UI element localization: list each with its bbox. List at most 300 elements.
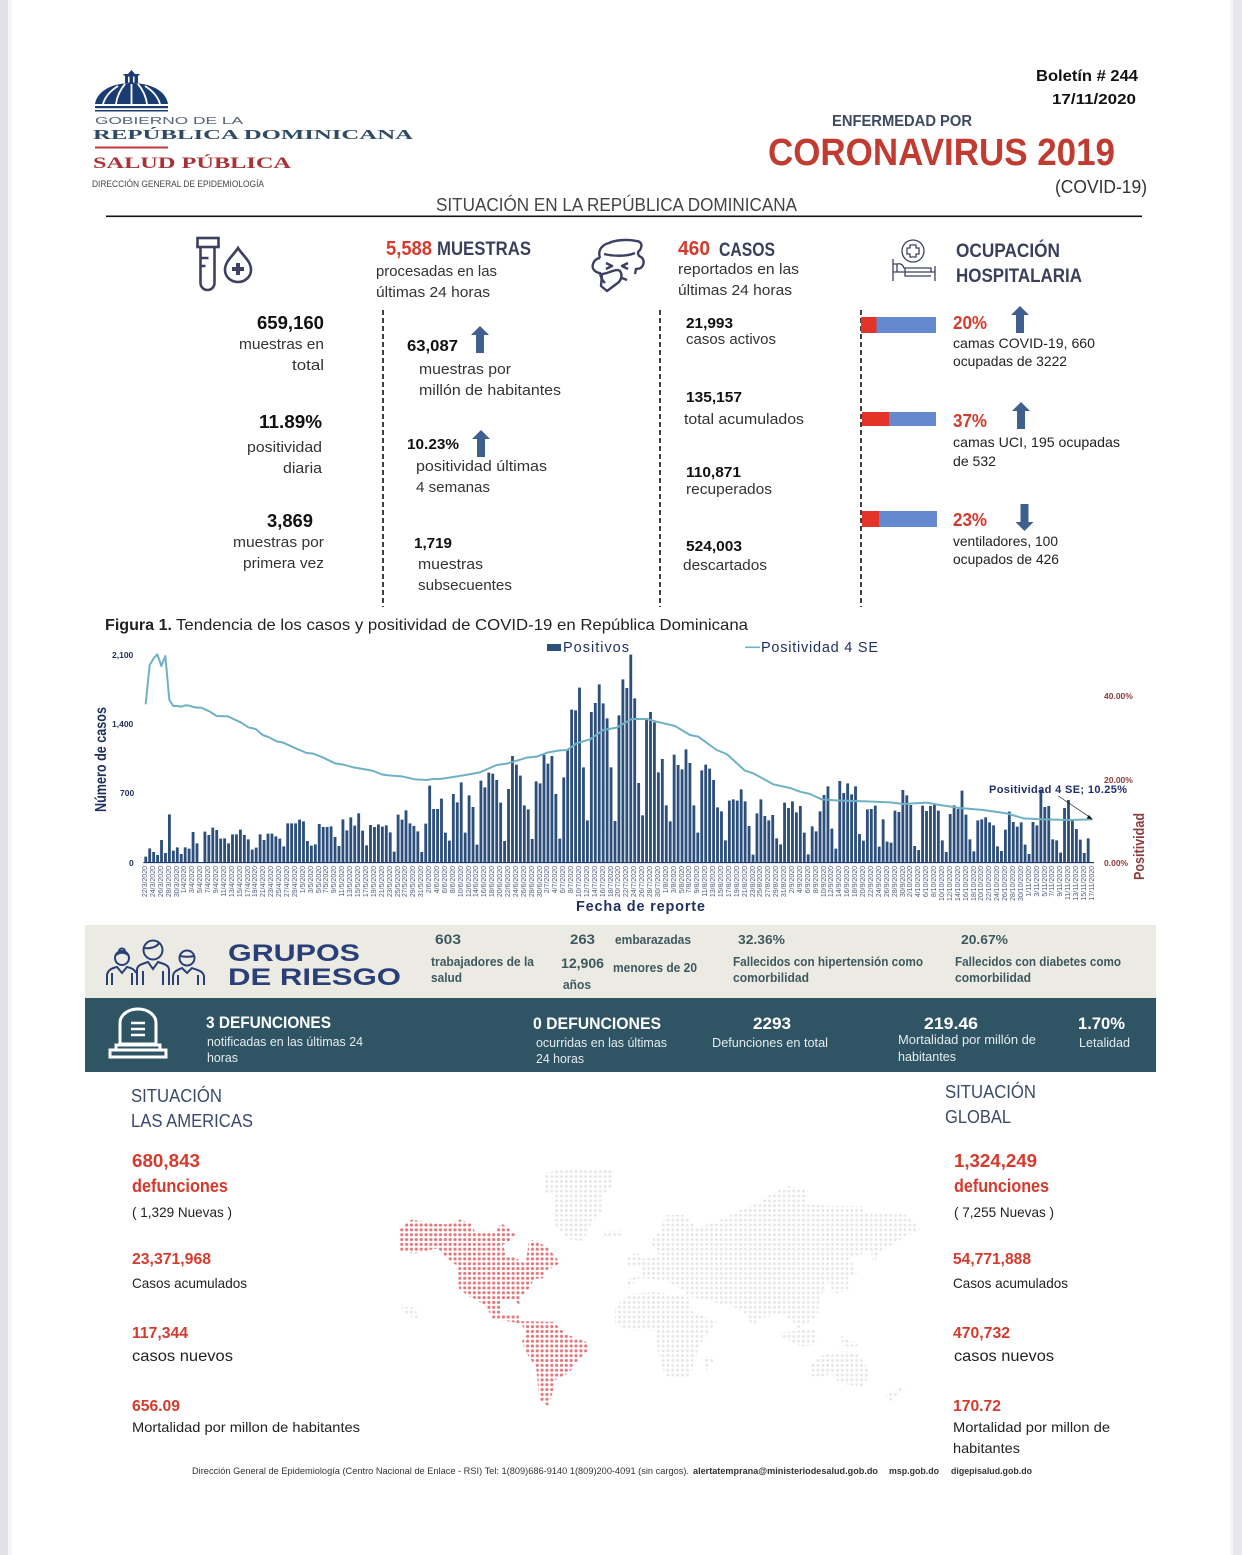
- chart x axis date labels: 14/7/2020: [592, 866, 599, 897]
- bar and text: camas UCI: de 532: [953, 453, 996, 469]
- chart x axis date labels: 23/8/2020: [750, 866, 757, 897]
- casos figures: total acumulados: [684, 411, 804, 428]
- panel: situación Las Américas: [131, 1085, 360, 1435]
- footer contact line: Dirección General de Epidemiología (Centro Nacional de Enlace - RSI) Tel: 1(809)686-9140 1(809)200-4091 (sin cargos).: [192, 1466, 689, 1476]
- defunciones figures: Defunciones en total: [712, 1035, 828, 1050]
- chart x axis date labels: 2/10/2020: [907, 866, 914, 897]
- chart legend: [547, 640, 878, 656]
- chart x axis date labels: 5/4/2020: [197, 866, 204, 893]
- chart x axis date labels: 6/6/2020: [442, 866, 449, 893]
- left axis labels: 2,100: [112, 650, 134, 660]
- chart x axis date labels: 20/9/2020: [860, 866, 867, 897]
- muestras totals column: primera vez: [243, 555, 324, 572]
- chart x axis date labels: 26/6/2020: [521, 866, 528, 897]
- muestras heading: MUESTRAS: [437, 239, 531, 260]
- chart x axis date labels: 24/3/2020: [150, 866, 157, 897]
- chart legend: Positividad 4 SE: [761, 640, 878, 656]
- chart x axis date labels: 10/10/2020: [939, 866, 946, 901]
- bulletin number and date: Boletín # 244: [1036, 68, 1138, 85]
- muestras totals column: 3,869: [267, 511, 313, 531]
- americas mortality: [132, 1398, 360, 1435]
- dotted world map: [399, 1169, 920, 1406]
- logo: Gobierno de la República Dominicana, Salud Pública: DIRECCIÓN GENERAL DE EPIDEMIOLOGÍA: [92, 179, 264, 189]
- muestras indicators column: 63,087: [407, 338, 458, 355]
- global mortality: [953, 1398, 1110, 1456]
- casos heading: últimas 24 horas: [678, 282, 792, 299]
- icon: tombstone: [110, 1009, 166, 1057]
- global heading: SITUACIÓN: [945, 1081, 1036, 1102]
- chart x axis date labels: 15/8/2020: [718, 866, 725, 897]
- muestras heading: 5,588: [386, 238, 432, 260]
- title: Enfermedad por Coronavirus 2019: [768, 113, 1147, 197]
- chart x axis date labels: 11/8/2020: [702, 866, 709, 897]
- bar and text: ventiladores: [862, 504, 1059, 567]
- title: Enfermedad por Coronavirus 2019: CORONAVIRUS 2019: [768, 132, 1115, 174]
- chart x axis date labels: 5/8/2020: [679, 866, 686, 893]
- global new cases: [953, 1325, 1054, 1365]
- global cumulative cases: Casos acumulados: [953, 1275, 1068, 1291]
- chart x axis date labels: 18/7/2020: [608, 866, 615, 897]
- callout arrow: positividad 4 SE: [1058, 796, 1093, 819]
- muestras indicators column: [407, 338, 561, 594]
- panel: ocupación hospitalaria: [861, 240, 1120, 567]
- chart x axis date labels: 24/10/2020: [994, 866, 1001, 901]
- chart x axis date labels: 31/5/2020: [418, 866, 425, 897]
- chart x axis date labels: 19/8/2020: [734, 866, 741, 897]
- chart x axis date labels: 30/7/2020: [655, 866, 662, 897]
- americas cumulative cases: Casos acumulados: [132, 1275, 247, 1291]
- chart x axis date labels: 13/4/2020: [229, 866, 236, 897]
- chart x axis date labels: 4/9/2020: [797, 866, 804, 893]
- muestras totals column: muestras por: [233, 534, 324, 551]
- icon: test tube and blood drop: [198, 238, 251, 290]
- chart x axis date labels: 20/7/2020: [615, 866, 622, 897]
- logo: Gobierno de la República Dominicana, Salud Pública: [92, 70, 415, 189]
- left axis labels: Número de casos: [93, 707, 110, 812]
- bulletin number and date: [1036, 68, 1138, 108]
- panel: grupos de riesgo: [85, 925, 1156, 998]
- defunciones figures: Mortalidad por millón de: [898, 1032, 1036, 1047]
- global new cases: casos nuevos: [954, 1348, 1054, 1365]
- grupos de riesgo heading: GRUPOS: [228, 940, 360, 967]
- bar and text: camas UCI: [862, 402, 1120, 469]
- risk group figures: años: [563, 978, 591, 992]
- chart x axis date labels: 14/6/2020: [473, 866, 480, 897]
- chart x axis date labels: 30/3/2020: [174, 866, 181, 897]
- chart x axis date labels: 26/7/2020: [639, 866, 646, 897]
- chart legend: Positivos: [563, 640, 629, 656]
- chart x axis date labels: 24/9/2020: [876, 866, 883, 897]
- muestras indicators column: 4 semanas: [416, 479, 490, 496]
- chart x axis date labels: 28/7/2020: [647, 866, 654, 897]
- logo: Gobierno de la República Dominicana, Salud Pública: REPÚBLICA DOMINICANA: [93, 126, 415, 143]
- chart x axis date labels: 22/9/2020: [868, 866, 875, 897]
- left axis labels: [93, 650, 134, 868]
- casos heading: reportados en las: [678, 261, 799, 278]
- casos figures: recuperados: [686, 481, 772, 498]
- americas heading: [131, 1085, 253, 1131]
- bar and text: ventiladores: ventiladores, 100: [953, 533, 1058, 549]
- chart x axis date labels: 5/5/2020: [316, 866, 323, 893]
- muestras indicators column: 10.23%: [407, 436, 459, 453]
- casos figures: [683, 315, 804, 574]
- casos heading: [678, 238, 799, 299]
- risk group figures: trabajadores de la: [431, 955, 535, 969]
- muestras totals column: 659,160: [257, 313, 324, 333]
- global cumulative cases: 54,771,888: [953, 1251, 1031, 1268]
- chart x axis date labels: 17/5/2020: [363, 866, 370, 897]
- muestras heading: procesadas en las: [376, 263, 497, 280]
- americas heading: SITUACIÓN: [131, 1085, 222, 1106]
- risk group figures: Fallecidos con diabetes como: [955, 955, 1121, 969]
- chart x axis date labels: 9/4/2020: [213, 866, 220, 893]
- chart x axis date labels: 23/4/2020: [268, 866, 275, 897]
- chart x axis date labels: 15/5/2020: [355, 866, 362, 897]
- chart x axis date labels: 13/8/2020: [710, 866, 717, 897]
- ocupación heading: OCUPACIÓN: [956, 240, 1060, 262]
- risk group figures: 263: [570, 931, 595, 947]
- footer contact line: msp.gob.do: [889, 1466, 939, 1476]
- footer contact line: digepisalud.gob.do: [951, 1466, 1032, 1476]
- bar and text: camas COVID-19: 20%: [953, 313, 987, 333]
- chart x axis date labels: 8/7/2020: [568, 866, 575, 893]
- chart x axis date labels: 9/8/2020: [694, 866, 701, 893]
- risk group figures: [431, 931, 1121, 992]
- global heading: GLOBAL: [945, 1107, 1011, 1127]
- chart x axis date labels: 24/6/2020: [513, 866, 520, 897]
- muestras totals column: total: [292, 357, 324, 374]
- americas heading: LAS AMERICAS: [131, 1111, 253, 1131]
- chart x axis date labels: 12/7/2020: [584, 866, 591, 897]
- risk group figures: Fallecidos con hipertensión como: [733, 955, 923, 969]
- left axis labels: 0: [129, 858, 134, 868]
- chart x axis date labels: 1/8/2020: [663, 866, 670, 893]
- chart x axis date labels: 22/6/2020: [505, 866, 512, 897]
- chart x axis date labels: 3/4/2020: [189, 866, 196, 893]
- icon: arrow up, muestras por millón: [471, 326, 489, 353]
- global heading: [945, 1081, 1036, 1127]
- risk group figures: embarazadas: [615, 933, 691, 947]
- chart x axis date labels: [142, 866, 1096, 901]
- footer contact line: [192, 1466, 1032, 1476]
- chart x axis date labels: 31/8/2020: [781, 866, 788, 897]
- line: positividad 4 SE: [146, 654, 1093, 820]
- casos figures: casos activos: [686, 331, 776, 348]
- defunciones figures: 0 DEFUNCIONES: [533, 1014, 661, 1033]
- chart x axis date labels: 22/10/2020: [986, 866, 993, 901]
- x axis title: Fecha de reporte: [576, 899, 705, 915]
- map: Americas: [399, 1219, 589, 1406]
- global mortality: Mortalidad por millon de: [953, 1419, 1110, 1435]
- chart x axis date labels: 12/9/2020: [828, 866, 835, 897]
- chart x axis date labels: 9/11/2020: [1057, 866, 1064, 897]
- chart x axis date labels: 22/3/2020: [142, 866, 149, 897]
- chart x axis date labels: 8/10/2020: [931, 866, 938, 897]
- global deaths: defunciones: [954, 1176, 1049, 1196]
- casos figures: descartados: [683, 557, 767, 574]
- chart x axis date labels: 8/6/2020: [450, 866, 457, 893]
- defunciones figures: 2293: [753, 1014, 791, 1033]
- chart x axis date labels: 18/9/2020: [852, 866, 859, 897]
- chart x axis date labels: 18/6/2020: [489, 866, 496, 897]
- chart: positivos bars and positividad line: [93, 640, 1148, 915]
- bar and text: camas UCI: camas UCI, 195 ocupadas: [953, 434, 1120, 450]
- chart x axis date labels: 26/10/2020: [1002, 866, 1009, 901]
- casos figures: 110,871: [686, 464, 741, 481]
- americas new cases: [132, 1325, 233, 1365]
- chart x axis date labels: 1/4/2020: [181, 866, 188, 893]
- global deaths: [954, 1151, 1054, 1220]
- muestras indicators column: 1,719: [414, 536, 452, 552]
- icon: face with mask: [593, 240, 644, 291]
- defunciones figures: [206, 1013, 1130, 1066]
- risk group figures: comorbilidad: [733, 971, 809, 985]
- global deaths: ( 7,255 Nuevas ): [954, 1204, 1054, 1220]
- chart x axis date labels: 2/7/2020: [544, 866, 551, 893]
- bar and text: camas COVID-19: camas COVID-19, 660: [953, 335, 1095, 351]
- logo: Gobierno de la República Dominicana, Salud Pública: GOBIERNO DE LA: [95, 115, 243, 127]
- global mortality: habitantes: [953, 1440, 1020, 1456]
- icon: people: [107, 940, 204, 985]
- right axis labels: 0.00%: [1104, 858, 1129, 868]
- americas cumulative cases: [132, 1251, 247, 1291]
- title: Enfermedad por Coronavirus 2019: (COVID-19): [1055, 177, 1147, 197]
- chart x axis date labels: 20/10/2020: [978, 866, 985, 901]
- americas deaths: 680,843: [132, 1151, 200, 1171]
- chart x axis date labels: 12/10/2020: [947, 866, 954, 901]
- chart x axis date labels: 2/9/2020: [789, 866, 796, 893]
- chart x axis date labels: 10/6/2020: [458, 866, 465, 897]
- grupos de riesgo heading: [228, 940, 401, 991]
- chart x axis date labels: 16/9/2020: [844, 866, 851, 897]
- chart x axis date labels: 15/4/2020: [237, 866, 244, 897]
- muestras totals column: [233, 313, 324, 572]
- chart x axis date labels: 21/8/2020: [742, 866, 749, 897]
- defunciones figures: 3 DEFUNCIONES: [206, 1013, 331, 1032]
- casos heading: 460: [678, 238, 710, 260]
- chart x axis date labels: 7/5/2020: [323, 866, 330, 893]
- map: rest of the world: [401, 1169, 920, 1403]
- chart x axis date labels: 7/8/2020: [686, 866, 693, 893]
- americas cumulative cases: 23,371,968: [132, 1251, 211, 1268]
- bar and text: ventiladores: 23%: [953, 510, 987, 530]
- chart x axis date labels: 7/4/2020: [205, 866, 212, 893]
- defunciones figures: 219.46: [924, 1014, 978, 1033]
- chart x axis date labels: 13/11/2020: [1073, 866, 1080, 901]
- chart x axis date labels: 4/7/2020: [552, 866, 559, 893]
- bar and text: camas UCI: 37%: [953, 411, 987, 431]
- chart x axis date labels: 11/4/2020: [221, 866, 228, 897]
- chart x axis date labels: 29/4/2020: [292, 866, 299, 897]
- defunciones figures: notificadas en las últimas 24: [207, 1034, 363, 1049]
- title: Enfermedad por Coronavirus 2019: ENFERMEDAD POR: [832, 113, 972, 130]
- chart x axis date labels: 18/10/2020: [971, 866, 978, 901]
- chart x axis date labels: 28/10/2020: [1010, 866, 1017, 901]
- muestras indicators column: muestras: [418, 556, 483, 573]
- chart x axis date labels: 14/9/2020: [836, 866, 843, 897]
- chart x axis date labels: 7/11/2020: [1049, 866, 1056, 897]
- panel: situación global: [945, 1081, 1110, 1456]
- defunciones figures: ocurridas en las últimas: [536, 1035, 667, 1050]
- ocupación heading: HOSPITALARIA: [956, 266, 1082, 287]
- global cumulative cases: [953, 1251, 1068, 1291]
- chart x axis date labels: 26/9/2020: [884, 866, 891, 897]
- chart x axis date labels: 10/9/2020: [821, 866, 828, 897]
- chart x axis date labels: 30/6/2020: [537, 866, 544, 897]
- chart x axis date labels: 22/7/2020: [623, 866, 630, 897]
- bulletin number and date: 17/11/2020: [1052, 92, 1136, 108]
- right axis labels: Positividad: [1131, 813, 1148, 880]
- chart x axis date labels: 21/5/2020: [379, 866, 386, 897]
- chart x axis date labels: 27/4/2020: [284, 866, 291, 897]
- defunciones figures: habitantes: [898, 1049, 956, 1064]
- risk group figures: 32.36%: [738, 932, 785, 947]
- americas deaths: [132, 1151, 232, 1220]
- panel: defunciones: [85, 998, 1156, 1072]
- defunciones figures: Letalidad: [1079, 1035, 1130, 1050]
- bar and text: camas COVID-19: [861, 306, 1095, 369]
- chart x axis date labels: 19/5/2020: [371, 866, 378, 897]
- chart x axis date labels: 4/10/2020: [915, 866, 922, 897]
- figure title: Figura 1.: [105, 617, 172, 634]
- callout: positividad 4 SE value: Positividad 4 SE; 10.25%: [989, 784, 1127, 796]
- muestras totals column: 11.89%: [259, 412, 322, 432]
- chart x axis date labels: 19/4/2020: [252, 866, 259, 897]
- chart x axis date labels: 16/6/2020: [481, 866, 488, 897]
- panel: muestras: [233, 238, 561, 594]
- risk group figures: 20.67%: [961, 932, 1008, 947]
- chart x axis date labels: 28/3/2020: [166, 866, 173, 897]
- defunciones figures: 1.70%: [1078, 1014, 1125, 1033]
- chart x axis date labels: 5/11/2020: [1042, 866, 1049, 897]
- chart x axis date labels: 11/11/2020: [1065, 866, 1072, 900]
- chart x axis date labels: 3/8/2020: [671, 866, 678, 893]
- americas deaths: defunciones: [132, 1176, 228, 1196]
- chart x axis date labels: 17/11/2020: [1089, 866, 1096, 901]
- muestras heading: últimas 24 horas: [376, 284, 490, 301]
- chart x axis date labels: 2/6/2020: [426, 866, 433, 893]
- chart x axis date labels: 17/4/2020: [245, 866, 252, 897]
- footer contact line: alertatemprana@ministeriodesalud.gob.do: [693, 1466, 879, 1476]
- right axis labels: 20.00%: [1104, 775, 1133, 785]
- logo: Gobierno de la República Dominicana, Salud Pública: SALUD PÚBLICA: [93, 155, 292, 172]
- americas new cases: casos nuevos: [132, 1348, 233, 1365]
- casos heading: CASOS: [719, 240, 775, 261]
- muestras totals column: diaria: [283, 460, 323, 477]
- chart x axis date labels: 23/5/2020: [387, 866, 394, 897]
- muestras indicators column: millón de habitantes: [419, 382, 561, 399]
- bar and text: ventiladores: ocupados de 426: [953, 551, 1059, 567]
- chart x axis date labels: 21/4/2020: [260, 866, 267, 897]
- chart x axis date labels: 16/10/2020: [963, 866, 970, 901]
- chart x axis date labels: 30/10/2020: [1018, 866, 1025, 901]
- chart x axis date labels: 14/10/2020: [955, 866, 962, 901]
- global deaths: 1,324,249: [954, 1151, 1037, 1171]
- grupos de riesgo heading: DE RIESGO: [228, 964, 401, 991]
- chart x axis date labels: 6/9/2020: [805, 866, 812, 893]
- risk group figures: 603: [435, 931, 461, 947]
- bar and text: camas COVID-19: ocupadas de 3222: [953, 353, 1067, 369]
- chart x axis date labels: 27/8/2020: [765, 866, 772, 897]
- chart x axis date labels: 28/6/2020: [529, 866, 536, 897]
- risk group figures: 12,906: [561, 955, 604, 971]
- casos figures: 524,003: [686, 538, 742, 555]
- muestras indicators column: positividad últimas: [416, 458, 547, 475]
- chart x axis date labels: 15/11/2020: [1081, 866, 1088, 901]
- chart x axis date labels: 29/8/2020: [773, 866, 780, 897]
- left axis labels: 700: [120, 788, 134, 798]
- americas mortality: Mortalidad por millon de habitantes: [132, 1419, 360, 1435]
- chart x axis date labels: 27/5/2020: [402, 866, 409, 897]
- left axis labels: 1,400: [112, 719, 134, 729]
- chart x axis date labels: 13/5/2020: [347, 866, 354, 897]
- americas deaths: ( 1,329 Nuevas ): [132, 1204, 232, 1220]
- chart x axis date labels: 12/6/2020: [466, 866, 473, 897]
- chart x axis date labels: 29/5/2020: [410, 866, 417, 897]
- chart x axis date labels: 11/5/2020: [339, 866, 346, 897]
- right axis labels: 40.00%: [1104, 691, 1133, 701]
- chart x axis date labels: 25/8/2020: [757, 866, 764, 897]
- chart x axis date labels: 10/7/2020: [576, 866, 583, 897]
- icon: arrow up, positividad: [472, 430, 490, 457]
- ocupación heading: [956, 240, 1082, 287]
- defunciones figures: horas: [207, 1050, 238, 1065]
- section heading: situación en la República Dominicana: SITUACIÓN EN LA REPÚBLICA DOMINICANA: [436, 194, 797, 215]
- figure title: Tendencia de los casos y positividad de COVID-19 en República Dominicana: [176, 617, 748, 634]
- chart x axis date labels: 20/6/2020: [497, 866, 504, 897]
- chart x axis date labels: 1/5/2020: [300, 866, 307, 893]
- global mortality: 170.72: [953, 1398, 1001, 1415]
- chart x axis date labels: 25/4/2020: [276, 866, 283, 897]
- chart x axis date labels: 17/8/2020: [726, 866, 733, 897]
- global new cases: 470,732: [953, 1325, 1010, 1342]
- chart x axis date labels: 4/6/2020: [434, 866, 441, 893]
- casos figures: 135,157: [686, 389, 742, 406]
- chart x axis date labels: 6/7/2020: [560, 866, 567, 893]
- chart x axis date labels: 1/11/2020: [1026, 866, 1033, 897]
- bars: positivos per day: [144, 655, 1090, 863]
- chart x axis date labels: 9/5/2020: [331, 866, 338, 893]
- chart x axis date labels: 25/5/2020: [394, 866, 402, 897]
- chart x axis date labels: 3/11/2020: [1034, 866, 1041, 897]
- icon: dome: [95, 70, 168, 112]
- chart x axis date labels: 30/9/2020: [900, 866, 906, 897]
- muestras totals column: muestras en: [239, 336, 324, 353]
- chart x axis date labels: 16/7/2020: [600, 866, 607, 897]
- muestras totals column: positividad: [247, 439, 322, 456]
- plot area: [143, 654, 1094, 863]
- americas mortality: 656.09: [132, 1398, 180, 1415]
- icon: hospital bed: [893, 240, 935, 281]
- chart x axis date labels: 28/9/2020: [892, 866, 899, 897]
- defunciones figures: 24 horas: [536, 1051, 584, 1066]
- chart x axis date labels: 3/5/2020: [308, 866, 315, 893]
- muestras indicators column: muestras por: [419, 361, 511, 378]
- risk group figures: menores de 20: [613, 961, 697, 975]
- americas new cases: 117,344: [132, 1325, 188, 1342]
- risk group figures: salud: [431, 971, 462, 985]
- right axis labels: [1104, 691, 1148, 880]
- chart x axis date labels: 26/3/2020: [158, 866, 165, 897]
- chart x axis date labels: 24/7/2020: [631, 866, 638, 897]
- muestras indicators column: subsecuentes: [418, 577, 512, 594]
- chart x axis date labels: 6/10/2020: [923, 866, 930, 897]
- casos figures: 21,993: [686, 315, 733, 332]
- risk group figures: comorbilidad: [955, 971, 1031, 985]
- chart x axis date labels: 8/9/2020: [813, 866, 820, 893]
- muestras heading: [376, 238, 531, 301]
- panel: casos: [678, 238, 804, 574]
